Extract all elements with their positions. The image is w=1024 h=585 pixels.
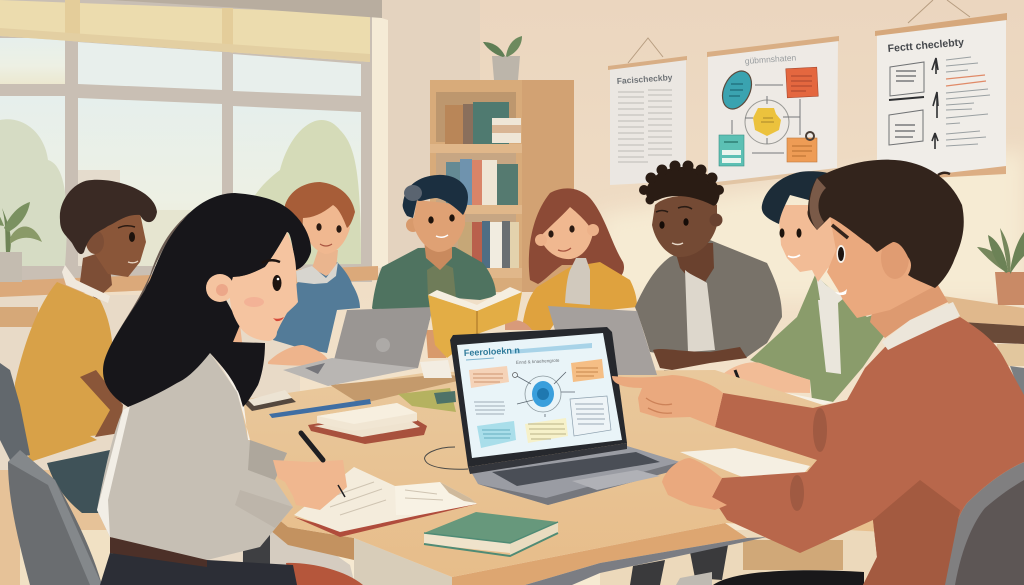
curly hair — [639, 160, 724, 206]
person: red-haired student in blue sweater — [268, 182, 360, 366]
person: student in green jacket — [700, 171, 893, 407]
window sill — [0, 266, 378, 327]
plant right — [977, 228, 1024, 305]
person: student in green sweater — [372, 175, 496, 358]
under-table area — [240, 500, 843, 585]
plant left — [0, 202, 42, 282]
poster: left — [608, 38, 687, 185]
laptop: grey back — [548, 306, 657, 375]
person: student with curly hair — [635, 160, 782, 383]
person: student with long brown hair — [505, 188, 637, 330]
green book — [424, 512, 558, 556]
laptop: grey left — [283, 307, 433, 386]
side desk — [943, 296, 1024, 404]
main laptop — [425, 327, 680, 505]
table items: pen, notebooks, books — [243, 360, 456, 444]
poster: left: Facischeckby — [616, 72, 673, 86]
person: woman writing — [97, 193, 363, 585]
bookshelf — [430, 80, 574, 292]
open notebook — [294, 467, 477, 537]
chairs left — [0, 363, 102, 585]
main laptop: Feeroloekn n — [464, 345, 520, 358]
table — [240, 370, 1024, 585]
main laptop: Ennd & knaehengrote — [516, 358, 560, 365]
poster: diagram — [707, 36, 839, 187]
chair right — [940, 462, 1024, 585]
plant on shelf — [483, 36, 522, 80]
poster: fact checking — [875, 0, 1007, 178]
window — [0, 0, 388, 282]
person: boy in mustard shirt — [15, 180, 157, 513]
yellow open book — [428, 287, 522, 358]
poster: fact checking: Fectt checlebty — [887, 36, 965, 55]
paper stack right — [680, 448, 810, 478]
person: man pointing — [612, 160, 1024, 585]
poster: diagram: gübmnshaten — [744, 52, 797, 66]
